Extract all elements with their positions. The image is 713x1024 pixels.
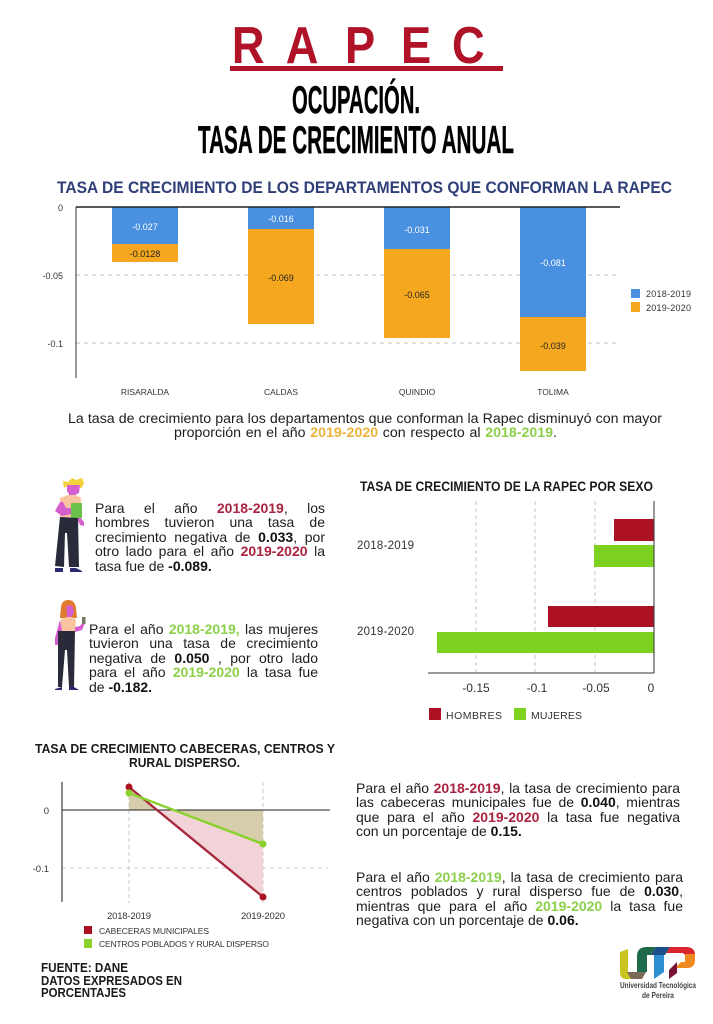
text block: women bbox=[89, 621, 318, 695]
bars: Risaralda bbox=[112, 207, 178, 262]
heading: sex chart: TASA DE CRECIMIENTO DE LA RAPEC POR SEXO bbox=[360, 479, 653, 494]
text block: men: otro lado para el año 2019-2020 la bbox=[95, 543, 325, 559]
axis labels: 0 bbox=[44, 806, 49, 817]
y axis labels: -0.05 bbox=[42, 271, 63, 281]
text block: women: tuvieron una tasa de crecimiento bbox=[89, 635, 318, 651]
x axis labels bbox=[121, 387, 569, 397]
category labels bbox=[357, 540, 414, 638]
source note: DATOS EXPRESADOS EN bbox=[41, 974, 182, 988]
logo: UTP bbox=[620, 947, 696, 1000]
stacked bar chart: departments bbox=[42, 203, 691, 397]
text block: men: tasa fue de -0.089. bbox=[95, 558, 212, 574]
icon: woman with phone bbox=[55, 600, 86, 690]
source note bbox=[41, 961, 182, 1000]
bars: Quindio: -0.065 bbox=[404, 290, 430, 300]
bars: Tolima bbox=[520, 207, 586, 371]
bars: Quindio: -0.031 bbox=[404, 225, 430, 235]
bars 2019-2020 bbox=[437, 606, 654, 653]
text block: cabeceras: con un porcentaje de 0.15. bbox=[356, 823, 522, 839]
line: centros poblados bbox=[126, 790, 266, 848]
logo text: de Pereira bbox=[642, 990, 674, 1000]
value axis labels: -0.05 bbox=[582, 681, 610, 695]
text block: men bbox=[95, 500, 326, 574]
text block: men: crecimiento negativa de 0.033, por bbox=[95, 529, 325, 545]
text block: cabeceras bbox=[356, 780, 680, 839]
source note: FUENTE: DANE bbox=[41, 961, 128, 975]
legend: 2019-2020 bbox=[646, 303, 691, 313]
x axis labels: QUINDIO bbox=[399, 387, 436, 397]
text block: women: negativa de 0.050 , por otro lado bbox=[89, 650, 318, 666]
bars: Quindio bbox=[384, 207, 450, 338]
text block: women: Para el año 2018-2019, las mujeres bbox=[89, 621, 318, 637]
line: cabeceras bbox=[126, 784, 266, 900]
heading: area chart: TASA DE CRECIMIENTO CABECERAS, CENTROS Y bbox=[35, 741, 335, 756]
text block: men: hombres tuvieron una tasa de bbox=[95, 514, 325, 530]
bars: Tolima: -0.039 bbox=[540, 341, 566, 351]
subtitle: ocupación, tasa de crecimiento anual bbox=[198, 78, 514, 162]
value axis labels bbox=[462, 681, 655, 695]
axis labels: 2018-2019 bbox=[107, 911, 151, 922]
x axis labels: RISARALDA bbox=[121, 387, 169, 397]
legend: 2018-2019 bbox=[646, 289, 691, 299]
category labels: 2019-2020 bbox=[357, 626, 414, 638]
value axis labels: 0 bbox=[648, 681, 655, 695]
text block: departments summary: proporción en el año 2019-2020 con respecto al 2018-2019. bbox=[174, 425, 557, 441]
text block: women: para el año 2019-2020 la tasa fue bbox=[89, 664, 318, 680]
category labels: 2018-2019 bbox=[357, 540, 414, 552]
legend: MUJERES bbox=[531, 710, 582, 722]
bars: Caldas: -0.069 bbox=[268, 273, 294, 283]
x axis labels: CALDAS bbox=[264, 387, 298, 397]
text block: men: Para el año 2018-2019, los bbox=[95, 500, 325, 516]
axis labels: 2019-2020 bbox=[241, 911, 285, 922]
y axis labels: 0 bbox=[58, 203, 63, 213]
source note: PORCENTAJES bbox=[41, 986, 126, 1000]
value axis labels: -0.15 bbox=[462, 681, 490, 695]
text block: centros poblados: mientras que para el año 2019-2020 la tasa fue bbox=[356, 898, 683, 914]
legend: HOMBRES bbox=[446, 710, 502, 722]
text block: cabeceras: que para el año 2019-2020 la tasa fue negativa bbox=[356, 809, 680, 825]
text block: centros poblados: centros poblados y rural disperso fue de 0.030, bbox=[356, 883, 683, 899]
text block: cabeceras: las cabeceras municipales fue de 0.040, mientras bbox=[356, 794, 680, 810]
subtitle: ocupación, tasa de crecimiento anual: OCUPACIÓN. bbox=[292, 78, 420, 122]
heading: area chart: RURAL DISPERSO. bbox=[129, 755, 240, 770]
legend bbox=[631, 289, 691, 313]
area line chart: cabeceras and rural bbox=[33, 782, 330, 949]
y axis labels bbox=[42, 203, 63, 349]
logo text bbox=[620, 980, 696, 1000]
bars: Tolima: -0.081 bbox=[540, 258, 566, 268]
heading: area chart bbox=[35, 741, 335, 770]
y axis labels: -0.1 bbox=[47, 339, 63, 349]
text block: centros poblados: negativa con un porcentaje de 0.06. bbox=[356, 912, 579, 928]
x axis labels: TOLIMA bbox=[537, 387, 569, 397]
bars: Caldas bbox=[248, 207, 314, 324]
text block: centros poblados: Para el año 2018-2019, la tasa de crecimiento para bbox=[356, 869, 683, 885]
text block: women: de -0.182. bbox=[89, 679, 152, 695]
bars 2018-2019 bbox=[594, 519, 654, 567]
icon: man with tablet bbox=[55, 478, 84, 572]
bars: Risaralda: -0.0128 bbox=[130, 249, 160, 259]
heading: departments chart: TASA DE CRECIMIENTO DE LOS DEPARTAMENTOS QUE CONFORMAN LA RAPEC bbox=[57, 178, 672, 197]
text block: centros poblados bbox=[356, 869, 684, 928]
horizontal bar chart: by sex bbox=[357, 501, 655, 722]
legend bbox=[429, 708, 582, 722]
bars: Caldas: -0.016 bbox=[268, 214, 294, 224]
bars: Risaralda: -0.027 bbox=[132, 222, 158, 232]
legend bbox=[84, 926, 269, 949]
text block: departments summary: La tasa de crecimiento para los departamentos que conforman la Rapec disminuyó con mayor bbox=[68, 411, 662, 427]
axis labels: -0.1 bbox=[33, 864, 49, 875]
axis labels bbox=[33, 806, 285, 922]
text block: departments summary bbox=[68, 411, 662, 441]
text block: cabeceras: Para el año 2018-2019, la tasa de crecimiento para bbox=[356, 780, 680, 796]
value axis labels: -0.1 bbox=[527, 681, 548, 695]
title: RAPEC: RAPEC bbox=[232, 17, 485, 75]
legend: CABECERAS MUNICIPALES bbox=[99, 926, 209, 936]
legend: CENTROS POBLADOS Y RURAL DISPERSO bbox=[99, 939, 269, 949]
